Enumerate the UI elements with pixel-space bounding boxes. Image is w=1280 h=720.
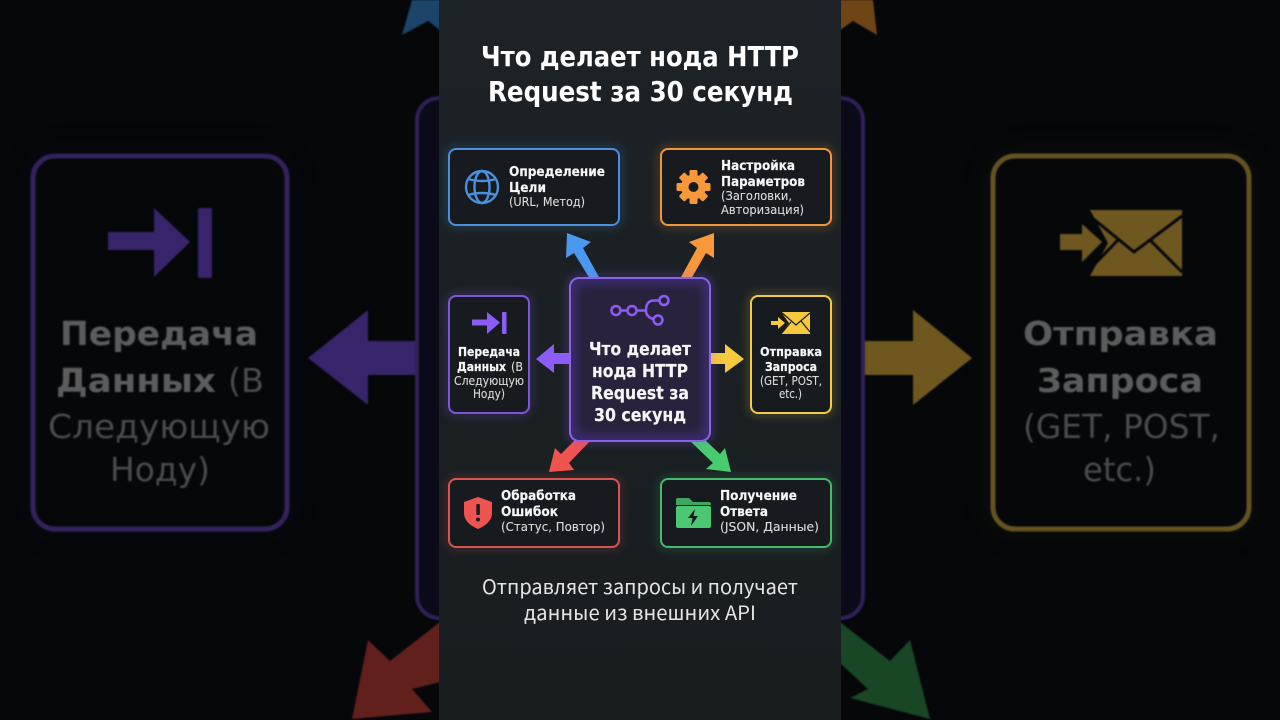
box glow (449, 479, 619, 547)
side text: data transfer: Передача (60, 314, 258, 353)
side glow: right box (992, 155, 1250, 530)
text: parameters (721, 158, 805, 217)
text: parameters: (Заголовки, (721, 189, 792, 203)
box glow (661, 149, 831, 225)
side arrow: left (308, 310, 419, 405)
box (449, 479, 619, 547)
side box: send request (993, 156, 1249, 529)
side text: send request (1023, 314, 1220, 489)
text: send request: Запроса (765, 360, 817, 374)
side arrow: right (865, 310, 972, 405)
box (570, 278, 710, 441)
text: errors: (Статус, Повтор) (501, 520, 605, 534)
side text: data transfer: Ноду) (110, 450, 210, 489)
title: Request за 30 секунд (488, 75, 793, 108)
arrow: to send (710, 344, 744, 373)
side text: send request: Отправка (1023, 314, 1218, 353)
text: center node title (589, 339, 691, 426)
text: goal: Определение (509, 164, 605, 180)
text: parameters: Авторизация) (721, 203, 804, 217)
title: Что делает нода HTTP (481, 40, 799, 73)
panel: transfer (449, 296, 529, 413)
side text: send request: Запроса (1037, 361, 1203, 400)
text: transfer: Данных (457, 360, 506, 374)
side arrow: orange fragment (840, 0, 877, 35)
text: response (720, 488, 819, 534)
box glow (570, 278, 710, 441)
text: goal: (URL, Метод) (509, 195, 585, 209)
panel: parameters (661, 149, 831, 225)
icon: node graph (612, 296, 668, 324)
blurred right side panel (803, 0, 1250, 719)
text: transfer: Ноду) (473, 387, 505, 401)
side arrow: green fragment (840, 622, 930, 719)
side icon: transfer arrow (108, 208, 212, 278)
box (661, 149, 831, 225)
blurred left side panel (32, 0, 477, 719)
side text: send request: (GET, POST, (1023, 407, 1220, 446)
text: transfer (454, 345, 524, 401)
text: transfer: (В (511, 360, 523, 374)
subtitle: Отправляет запросы и получает (482, 571, 798, 600)
icon: globe (466, 171, 498, 203)
text: send request: etc.) (779, 387, 802, 401)
box glow (449, 149, 619, 225)
side text: data transfer: (В (228, 361, 264, 400)
text: send request: (GET, POST, (760, 374, 822, 388)
box glow (751, 296, 831, 413)
box (751, 296, 831, 413)
text: errors (501, 488, 605, 534)
text: transfer: Следующую (454, 374, 524, 388)
arrow: to errors (549, 440, 591, 472)
box (449, 296, 529, 413)
text: goal (509, 164, 605, 209)
side text: send request: etc.) (1083, 450, 1156, 489)
inner glow (570, 278, 710, 441)
panel: goal (449, 149, 619, 225)
icon: gear (676, 170, 710, 204)
icon: transfer arrow (472, 312, 506, 334)
title (481, 40, 799, 108)
text: response: Ответа (720, 504, 768, 520)
text: errors: Ошибок (501, 504, 558, 520)
panel: center node (570, 278, 710, 441)
text: center node title: нода HTTP (592, 361, 688, 382)
box glow (449, 296, 529, 413)
side center box: left edge (417, 98, 477, 618)
side arrow: blue fragment (402, 0, 440, 35)
box border (570, 278, 710, 441)
text: errors: Обработка (501, 488, 576, 504)
icon: shield (464, 497, 492, 529)
side box: data transfer (33, 156, 287, 529)
icon: folder (676, 498, 711, 528)
text: send request (760, 345, 822, 401)
text: center node title: Что делает (589, 339, 691, 360)
side center box: right edge (803, 98, 863, 618)
text: transfer: Передача (458, 345, 520, 359)
side glow: left box (32, 155, 288, 530)
panel: response (661, 479, 831, 547)
text: parameters: Параметров (721, 174, 805, 190)
subtitle: данные из внешних API (524, 597, 756, 626)
box (661, 479, 831, 547)
text: parameters: Настройка (721, 158, 795, 174)
central panel (439, 0, 841, 720)
icon: envelope (771, 312, 810, 334)
text: response: Получение (720, 488, 797, 504)
side icon: envelope (1060, 210, 1182, 276)
arrow: to parameters (680, 233, 714, 279)
arrow: to response (689, 440, 731, 472)
text: center node title: 30 секунд (594, 405, 686, 426)
panel: send request (751, 296, 831, 413)
side arrow: red fragment (352, 622, 440, 719)
side text: data transfer: Данных (56, 361, 216, 400)
arrow: to transfer (536, 344, 571, 373)
box (449, 149, 619, 225)
side text: data transfer: Следующую (48, 407, 270, 446)
text: response: (JSON, Данные) (720, 520, 819, 534)
text: send request: Отправка (760, 345, 822, 359)
side text: data transfer (48, 314, 270, 489)
subtitle (482, 571, 798, 626)
text: center node title: Request за (591, 383, 689, 404)
arrow: to goal (566, 233, 600, 279)
text: goal: Цели (509, 180, 546, 196)
box glow (661, 479, 831, 547)
panel: errors (449, 479, 619, 547)
